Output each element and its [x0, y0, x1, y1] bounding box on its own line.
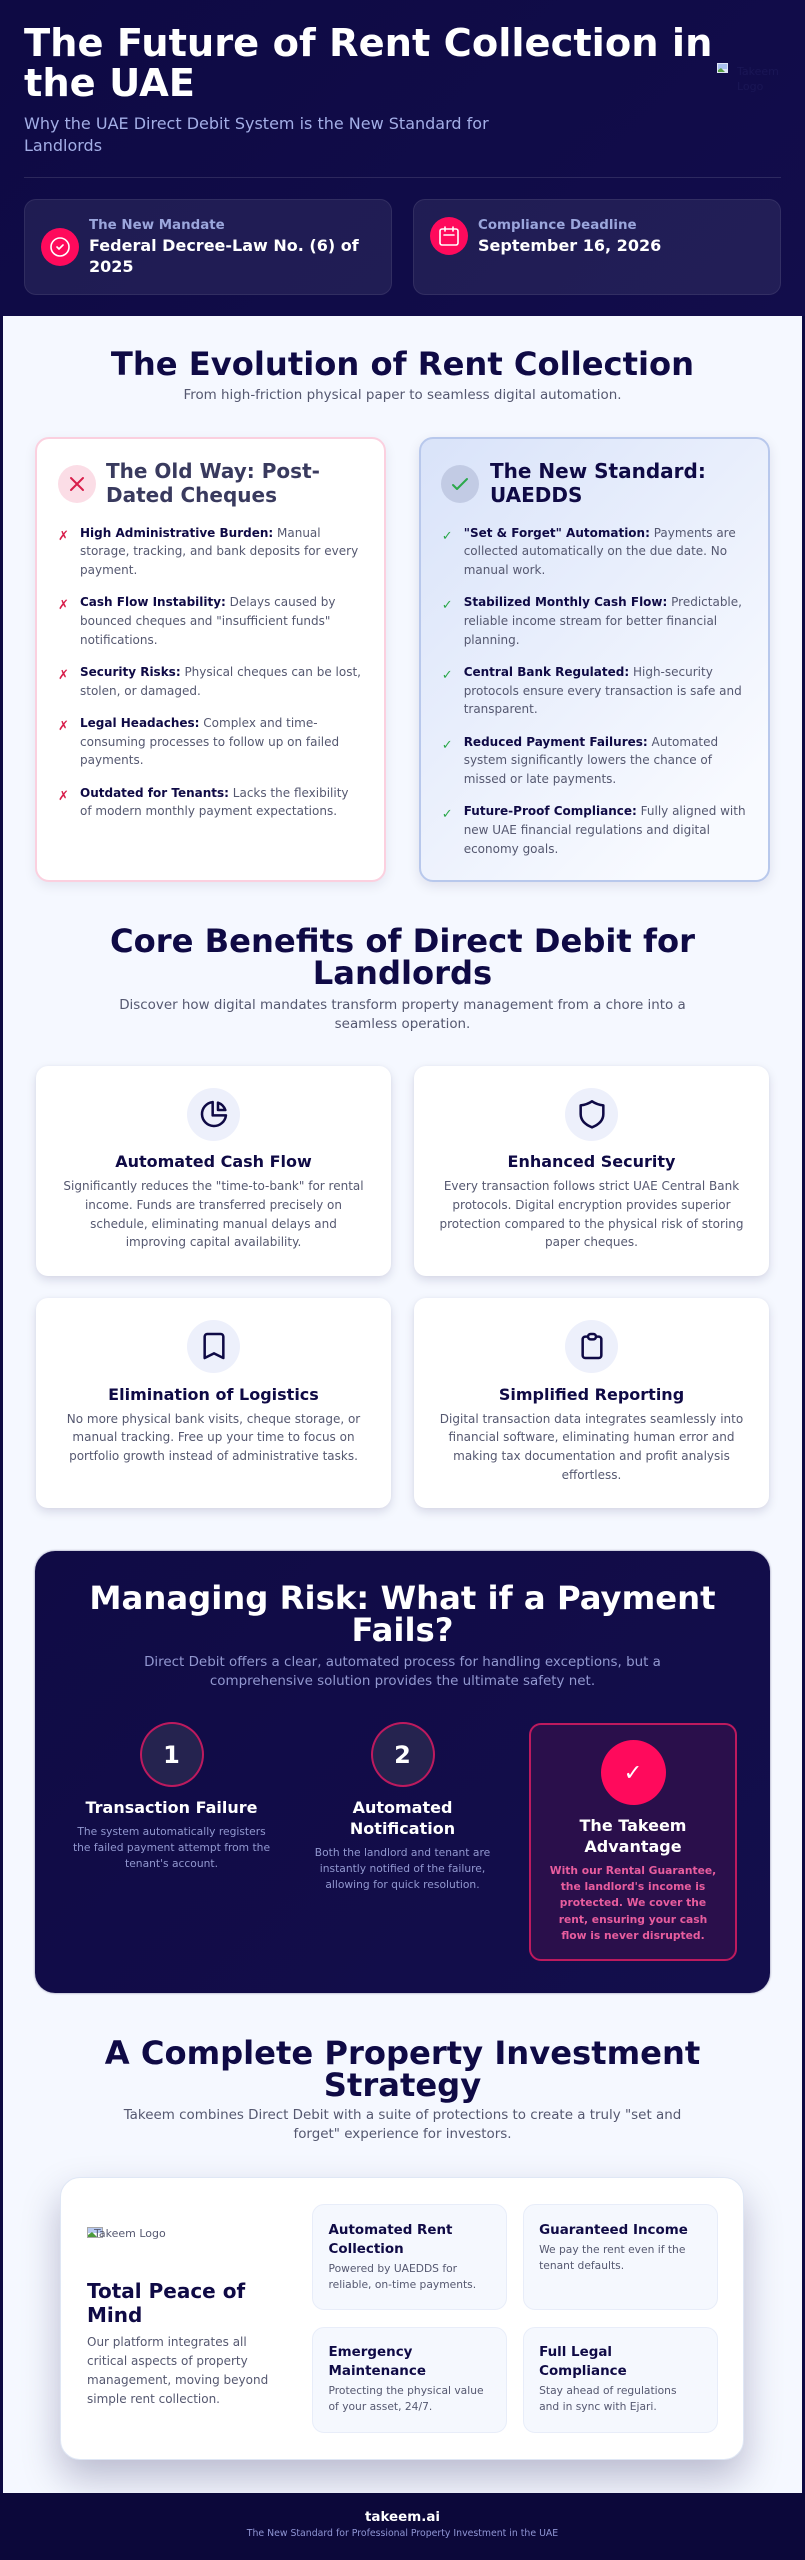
title	[24, 21, 712, 106]
panel text: Our platform integrates all	[87, 2335, 247, 2349]
icon: pie chart	[187, 1088, 240, 1140]
icon: calendar	[430, 217, 468, 255]
callout text: the landlord's income is	[561, 1880, 705, 1893]
step 2 title	[350, 1798, 455, 1838]
new standard list: Stabilized Monthly Cash Flow: Predictable,	[464, 595, 742, 609]
step 1 text	[73, 1825, 270, 1870]
feature text	[328, 2384, 484, 2413]
heading: property investment strategy: Strategy	[324, 2066, 481, 2104]
heading: core benefits	[110, 922, 695, 992]
step 1 text: The system automatically registers	[77, 1825, 266, 1838]
new standard list: collected automatically on the due date. No	[464, 544, 727, 558]
strategy subtitle: forget" experience for investors.	[293, 2127, 512, 2142]
callout title: The Takeem	[580, 1816, 686, 1835]
feature title	[328, 2223, 452, 2257]
old way list: Legal Headaches: Complex and time-	[80, 716, 318, 730]
panel text: management, moving beyond	[87, 2373, 268, 2387]
callout: the takeem advantage	[529, 1723, 737, 1961]
step 2 text: allowing for quick resolution.	[325, 1878, 480, 1891]
panel heading: Mind	[87, 2303, 142, 2327]
heading: core benefits: Landlords	[313, 954, 492, 992]
footer tagline: The New Standard for Professional Property Investment in the UAE	[247, 2528, 558, 2539]
panel: the old way: ✗	[58, 598, 69, 613]
icon: check circle: ✓	[624, 1760, 642, 1786]
new standard list: planning.	[464, 633, 520, 647]
feature: automated rent collection	[312, 2204, 507, 2310]
benefit card: enhanced security	[414, 1066, 769, 1276]
benefit card: simplified reporting	[414, 1298, 769, 1508]
heading: core benefits: Core Benefits of Direct Debit for	[110, 922, 695, 960]
icon: clipboard	[565, 1320, 618, 1372]
subtitle	[24, 114, 489, 155]
risk subtitle: Direct Debit offers a clear, automated process for handling exceptions, but a	[144, 1655, 661, 1670]
value: 2025	[89, 257, 134, 276]
callout text: With our Rental Guarantee,	[550, 1864, 716, 1877]
card text: No more physical bank visits, cheque storage, or	[67, 1412, 360, 1426]
heading: evolution: The Evolution of Rent Collection	[111, 345, 694, 383]
panel: total peace of mind	[60, 2177, 744, 2460]
old way heading	[106, 459, 320, 507]
new standard list: new UAE financial regulations and digital	[464, 823, 710, 837]
icon: check badge	[41, 228, 79, 266]
new standard list: Reduced Payment Failures: Automated	[464, 735, 718, 749]
feature text: reliable, on-time payments.	[328, 2278, 476, 2291]
step 2 badge: 2	[394, 1740, 411, 1768]
benefit card: automated cash flow	[36, 1066, 391, 1276]
title: The Future of Rent Collection in	[24, 21, 712, 66]
card text: schedule, eliminating manual delays and	[90, 1217, 337, 1231]
panel text	[87, 2335, 268, 2406]
new standard list	[442, 526, 746, 856]
old way list: High Administrative Burden: Manual	[80, 526, 321, 540]
card text: income. Funds are transferred precisely on	[85, 1198, 342, 1212]
step 2 text	[315, 1846, 490, 1891]
feature text: Stay ahead of regulations	[539, 2384, 677, 2397]
callout text: flow is never disrupted.	[561, 1929, 705, 1942]
old way list: payment.	[80, 563, 137, 577]
old way heading: The Old Way: Post-	[106, 459, 320, 483]
card text: manual tracking. Free up your time to focus on	[72, 1430, 355, 1444]
card text: Digital transaction data integrates seamlessly into	[440, 1412, 743, 1426]
step 2 title: Notification	[350, 1819, 455, 1838]
old way list: Outdated for Tenants: Lacks the flexibility	[80, 786, 349, 800]
risk heading	[89, 1579, 716, 1649]
strategy subtitle: Takeem combines Direct Debit with a suite of protections to create a truly "set and	[124, 2108, 681, 2123]
old way list: bounced cheques and "insufficient funds"	[80, 614, 330, 628]
new standard list: economy goals.	[464, 842, 558, 856]
new standard heading	[490, 459, 706, 507]
feature: full legal compliance	[523, 2326, 718, 2432]
new standard list: reliable income stream for better financial	[464, 614, 717, 628]
feature text: Powered by UAEDDS for	[328, 2262, 457, 2275]
callout text: protected. We cover the	[560, 1896, 706, 1909]
step 2 text: instantly notified of the failure,	[320, 1862, 485, 1875]
step 1 text: tenant's account.	[125, 1857, 218, 1870]
new standard list: missed or late payments.	[464, 772, 616, 786]
benefit card: elimination of logistics	[36, 1298, 391, 1508]
card title: Simplified Reporting	[499, 1384, 684, 1404]
subtitle: Landlords	[24, 136, 102, 155]
old way list	[58, 526, 361, 818]
callout text: rent, ensuring your cash	[559, 1913, 707, 1926]
new standard list: protocols ensure every transaction is safe and	[464, 684, 742, 698]
card text	[67, 1412, 360, 1463]
callout title: Advantage	[584, 1837, 682, 1856]
feature: guaranteed income	[523, 2204, 718, 2310]
card text: improving capital availability.	[126, 1235, 301, 1249]
card text	[63, 1179, 364, 1249]
footer	[0, 2492, 805, 2560]
old way heading: Dated Cheques	[106, 483, 277, 507]
panel text: critical aspects of property	[87, 2354, 248, 2368]
panel: the old way: ✗	[58, 668, 69, 683]
heading: property investment strategy	[104, 2034, 700, 2104]
new standard list: Central Bank Regulated: High-security	[464, 665, 713, 679]
step 2 text: Both the landlord and tenant are	[315, 1846, 490, 1859]
step 1 title: Transaction Failure	[85, 1798, 258, 1817]
subtitle: Why the UAE Direct Debit System is the New Standard for	[24, 114, 489, 133]
card text: protection compared to the physical risk of storing	[439, 1217, 744, 1231]
feature title	[328, 2345, 426, 2379]
strategy subtitle	[124, 2108, 681, 2142]
panel: the new standard: ✓	[442, 807, 453, 822]
panel: the new standard: ✓	[442, 668, 453, 683]
step 1 text: the failed payment attempt from the	[73, 1841, 270, 1854]
step 2 badge	[370, 1722, 434, 1787]
risk subtitle: comprehensive solution provides the ultimate safety net.	[210, 1674, 595, 1689]
new standard list: "Set & Forget" Automation: Payments are	[464, 526, 736, 540]
info card: the new mandate	[24, 199, 392, 295]
icon: shield	[565, 1088, 618, 1140]
feature text	[539, 2243, 685, 2272]
panel: the new standard: ✓	[442, 528, 453, 544]
panel text: simple rent collection.	[87, 2392, 220, 2406]
info card: compliance deadline	[413, 199, 781, 295]
card text: making tax documentation and profit analysis	[453, 1449, 730, 1463]
step 1 badge	[140, 1722, 204, 1787]
feature title: Collection	[328, 2242, 404, 2257]
feature title	[539, 2345, 627, 2379]
value	[89, 236, 359, 276]
feature text	[328, 2262, 476, 2291]
feature text: and in sync with Ejari.	[539, 2400, 657, 2413]
old way list: Cash Flow Instability: Delays caused by	[80, 595, 336, 609]
card text: protocols. Digital encryption provides superior	[452, 1198, 731, 1212]
label: Compliance Deadline	[478, 218, 637, 233]
card text	[439, 1179, 744, 1249]
callout text	[550, 1864, 716, 1942]
value: Federal Decree-Law No. (6) of	[89, 236, 359, 255]
step 2 title: Automated	[353, 1798, 452, 1817]
panel: the old way: ✗	[58, 789, 69, 804]
card title: Automated Cash Flow	[115, 1152, 312, 1170]
card text: effortless.	[562, 1468, 621, 1482]
old way list: notifications.	[80, 633, 158, 647]
panel: the old way	[35, 437, 386, 882]
old way list: consuming processes to follow up on failed	[80, 735, 339, 749]
value: September 16, 2026	[478, 236, 661, 255]
panel: the old way: ✗	[58, 719, 69, 734]
new standard list: Future-Proof Compliance: Fully aligned with	[464, 804, 746, 818]
new standard list: manual work.	[464, 563, 545, 577]
panel heading: Total Peace of	[87, 2279, 245, 2303]
panel: the new standard	[419, 437, 770, 882]
new standard list: system significantly lowers the chance of	[464, 753, 712, 767]
footer brand: takeem.ai	[365, 2510, 440, 2525]
card text	[440, 1412, 743, 1482]
heading: property investment strategy: A Complete Property Investment	[105, 2034, 700, 2072]
header logo: broken image	[717, 63, 779, 93]
header logo: broken image: Logo	[737, 80, 763, 93]
feature title: Compliance	[539, 2364, 627, 2379]
feature title: Maintenance	[328, 2364, 426, 2379]
evolution subtitle: From high-friction physical paper to seamless digital automation.	[183, 388, 622, 403]
core benefits subtitle: seamless operation.	[335, 1016, 470, 1032]
new standard heading: The New Standard:	[490, 459, 706, 483]
old way list: payments.	[80, 753, 144, 767]
old way list: storage, tracking, and bank deposits for every	[80, 544, 358, 558]
card text: Every transaction follows strict UAE Central Bank	[444, 1179, 739, 1193]
feature text: of your asset, 24/7.	[328, 2400, 432, 2413]
card title: Elimination of Logistics	[108, 1384, 319, 1404]
label: The New Mandate	[89, 218, 225, 233]
card title: Enhanced Security	[508, 1152, 675, 1170]
feature title: Full Legal	[539, 2345, 612, 2360]
card text: financial software, eliminating human error and	[449, 1430, 734, 1444]
panel: the new standard: ✓	[442, 598, 453, 613]
risk heading: Fails?	[351, 1611, 454, 1649]
old way list: of modern monthly payment expectations.	[80, 804, 337, 818]
panel: the old way: ✗	[58, 528, 69, 544]
panel heading	[87, 2279, 246, 2327]
card text: Significantly reduces the "time-to-bank" for rental	[63, 1179, 364, 1193]
panel: managing risk	[35, 1551, 770, 1993]
feature title: Emergency	[328, 2345, 412, 2360]
icon: check	[441, 465, 479, 503]
title: the UAE	[24, 61, 195, 106]
new standard heading: UAEDDS	[490, 483, 582, 507]
feature title: Automated Rent	[328, 2223, 452, 2238]
callout title	[580, 1816, 686, 1856]
risk subtitle	[144, 1655, 661, 1689]
logo: broken image: Takeem Logo	[94, 2227, 166, 2240]
feature: emergency maintenance	[312, 2326, 507, 2432]
feature text	[539, 2384, 677, 2413]
old way list: Security Risks: Physical cheques can be lost,	[80, 665, 361, 679]
old way list: stolen, or damaged.	[80, 684, 201, 698]
icon: check circle	[600, 1740, 666, 1805]
icon: cross	[58, 465, 96, 503]
core benefits subtitle	[119, 998, 686, 1032]
feature text: Protecting the physical value	[328, 2384, 484, 2397]
step 1 badge: 1	[163, 1740, 180, 1768]
header logo: broken image: Takeem	[737, 65, 779, 78]
risk heading: Managing Risk: What if a Payment	[89, 1579, 716, 1617]
feature text: tenant defaults.	[539, 2259, 624, 2272]
card text: portfolio growth instead of administrative tasks.	[69, 1449, 358, 1463]
icon: bookmark	[187, 1320, 240, 1372]
card text: paper cheques.	[545, 1235, 638, 1249]
new standard list: transparent.	[464, 702, 538, 716]
panel: the new standard: ✓	[442, 738, 453, 753]
core benefits subtitle: Discover how digital mandates transform property management from a chore into a	[119, 998, 686, 1012]
feature text: We pay the rent even if the	[539, 2243, 685, 2256]
header band	[0, 0, 805, 316]
feature title: Guaranteed Income	[539, 2223, 688, 2238]
